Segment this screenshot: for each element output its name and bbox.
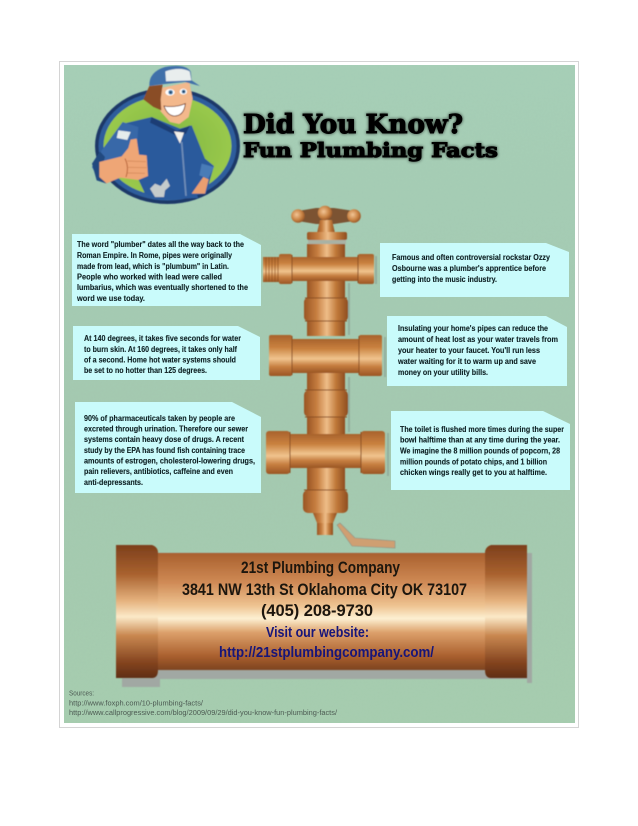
panel: fact water temperature: be set to no hotter than 125 degrees. [84,365,207,375]
panel: fact plumber origin: The word "plumber" dates all the way back to the [77,239,244,249]
page frame [60,62,578,728]
panel: fact water temperature [73,326,260,380]
panel: fact insulating pipes: water waiting for it to warm up and save [397,356,536,366]
panel: fact pharmaceuticals: anti-depressants. [84,477,143,487]
lower tee [266,431,385,535]
title [243,110,498,162]
panel: fact super bowl toilet: bowl halftime than at any time during the year. [400,434,560,444]
panel: fact Ozzy Osbourne: Osbourne was a plumber's apprentice before [392,263,546,273]
title: Fun Plumbing Facts [243,138,498,162]
banner text: Visit our website: [266,625,369,641]
panel: fact Ozzy Osbourne: Famous and often controversial rockstar Ozzy [392,252,550,262]
panel: fact plumber origin: People who worked with lead were called [77,272,222,282]
panel: fact insulating pipes [387,316,567,386]
panel: fact Ozzy Osbourne [380,243,569,297]
panel: fact super bowl toilet: chicken wings really get to you at halftime. [400,467,547,477]
panel: fact plumber origin: Roman Empire. In Rome, pipes were originally [77,250,232,260]
panel: fact insulating pipes: money on your utility bills. [398,367,488,377]
title: Did You Know? [243,110,463,140]
panel: fact plumber origin: lumbarius, which was eventually shortened to the [77,282,248,292]
lever [337,523,395,548]
panel: fact water temperature: At 140 degrees, it takes five seconds for water [84,333,242,343]
banner text: 3841 NW 13th St Oklahoma City OK 73107 [182,581,467,599]
panel: fact pharmaceuticals: pain relievers, antibiotics, caffeine and even [84,466,233,476]
handle [291,206,361,244]
panel: fact plumber origin [72,234,261,306]
sources: http://www.callprogressive.com/blog/2009/09/29/did-you-know-fun-plumbing-facts/ [69,710,337,717]
panel: fact super bowl toilet: We imagine the 8 million pounds of popcorn, 28 [400,446,560,456]
icon: copper pipe and faucet [263,206,395,548]
banner text: (405) 208-9730 [261,602,373,620]
panel: fact water temperature: of a second. Home hot water systems should [84,354,236,364]
title: Fun Plumbing Facts [243,138,498,162]
panel: fact pharmaceuticals: systems contain heavy dose of drugs. A recent [84,434,244,444]
panel: fact insulating pipes: Insulating your home's pipes can reduce the [398,323,548,333]
banner text [182,559,467,661]
banner text: http://21stplumbingcompany.com/ [219,645,434,661]
panel: company banner pipe [116,545,532,687]
panel: fact insulating pipes: your heater to your faucet. You'll run less [398,345,540,355]
title: Did You Know? [243,110,463,140]
panel: fact Ozzy Osbourne: getting into the music industry. [392,274,497,284]
panel: fact pharmaceuticals: 90% of pharmaceuticals taken by people are [84,413,235,423]
banner text: 21st Plumbing Company [241,559,401,577]
middle tee [269,335,382,434]
panel: fact plumber origin: made from lead, which is "plumbum" in Latin. [77,261,229,271]
panel: fact super bowl toilet: million pounds of potato chips, and 1 billion [400,456,547,466]
panel: fact water temperature: to burn skin. At 160 degrees, it takes only half [84,344,237,354]
background panel [64,65,575,723]
sources: Sources: [69,690,94,698]
panel: fact super bowl toilet: The toilet is flushed more times during the super [400,424,565,434]
sources [69,690,337,717]
upper tee [263,244,374,336]
icon: plumber mascot [92,66,240,204]
panel: fact super bowl toilet [391,411,570,490]
panel: fact pharmaceuticals: amounts of estrogen, cholesterol-lowering drugs, [84,456,255,466]
sources: http://www.foxph.com/10-plumbing-facts/ [69,700,203,708]
panel: fact plumber origin: word we use today. [76,293,145,303]
panel: fact insulating pipes: amount of heat lost as your water travels from [398,334,558,344]
panel: fact pharmaceuticals [75,402,261,493]
panel: fact pharmaceuticals: study by the EPA has found fish containing trace [84,445,245,455]
panel: fact pharmaceuticals: excreted through urination. Therefore our sewer [84,424,249,434]
